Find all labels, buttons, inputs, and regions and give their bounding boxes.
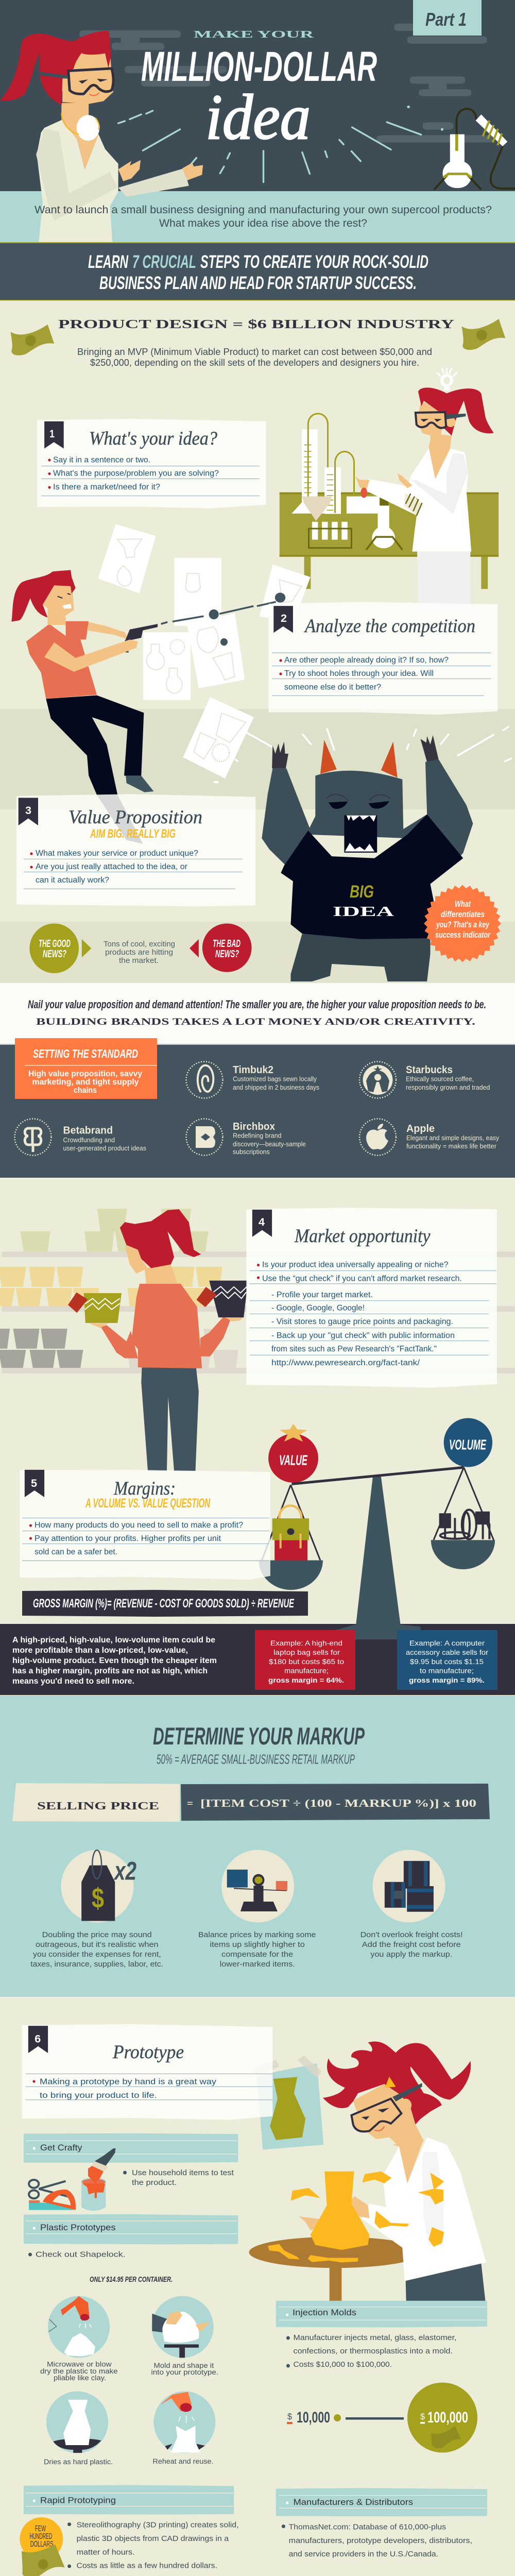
tip 3 freight boxes: you apply the markup.: [370, 1950, 452, 1959]
middle text: [104, 940, 175, 965]
step: dries: [44, 2392, 113, 2466]
tip 1 price tag: x2: [113, 1857, 136, 1886]
bullets: Are you just really attached to the idea, or: [36, 862, 187, 871]
bullets: [279, 656, 449, 692]
brand: betabrand: user-generated product ideas: [63, 1145, 146, 1152]
step: microwave: [40, 2296, 117, 2382]
ribbon 5: [25, 1470, 44, 1497]
bullets: [257, 1261, 462, 1367]
brand: timbuk2: [186, 1061, 319, 1098]
brand: birchbox: Birchbox: [233, 1121, 275, 1132]
brand: betabrand: [14, 1119, 146, 1155]
craft text: the product.: [132, 2178, 177, 2187]
middle text: products are hitting: [105, 948, 173, 957]
heading: learn 7 crucial steps: LEARN: [88, 252, 128, 272]
blue example box: $9.95 but costs $1.15: [410, 1657, 484, 1666]
margin explanation text: has a higher margin, profits are not as high, which: [12, 1667, 208, 1675]
bullets: [29, 1521, 243, 1556]
rapid prototyping text: matter of hours.: [77, 2548, 135, 2557]
bad news badge: THE BAD: [213, 938, 241, 950]
card: [16, 794, 255, 906]
bullets: sold can be a safer bet.: [35, 1548, 117, 1556]
cost range graphic: 10,000: [297, 2409, 330, 2426]
injection text: Manufacturer injects metal, glass, elastomer,: [294, 2333, 456, 2342]
bullets: - Visit stores to gauge price points and packaging.: [271, 1317, 453, 1326]
card: [246, 1208, 497, 1388]
price note: ONLY $14.95 PER CONTAINER.: [90, 2275, 173, 2284]
tip 2 scale: [198, 1850, 316, 1969]
step: reheat: [152, 2392, 215, 2465]
middle text: the market.: [119, 956, 159, 965]
bullets: Try to shoot holes through your idea. Will: [284, 669, 434, 678]
few hundred dollars icon: DOLLARS: [30, 2540, 54, 2549]
ribbon 4: 4: [259, 1216, 265, 1228]
shapelock text: Check out Shapelock.: [36, 2250, 126, 2259]
store shelves: [0, 1209, 515, 1374]
starburst callout: What: [455, 899, 471, 909]
gross margin formula: [22, 1590, 308, 1617]
bullets: What makes your service or product unique?: [36, 849, 198, 858]
tip 1 price tag: [30, 1850, 163, 1969]
tip 3 freight boxes: Don't overlook freight costs!: [360, 1930, 463, 1939]
few hundred dollars icon: [20, 2517, 65, 2576]
brand: betabrand: Crowdfunding and: [63, 1137, 115, 1144]
tip 1 price tag: taxes, insurance, supplies, labor, etc.: [30, 1960, 163, 1969]
heading: What's your idea?: [89, 428, 217, 449]
panel 5: margins: [20, 1470, 270, 1580]
bullets: can it actually work?: [36, 876, 109, 885]
injection molds bar: [276, 2301, 487, 2327]
starburst callout: success indicator: [435, 930, 491, 940]
title: idea: idea: [205, 82, 311, 153]
rules: [250, 1270, 496, 1355]
step: mold: Mold and shape it: [153, 2362, 214, 2369]
margin explanation text: [12, 1636, 217, 1686]
woman comparing cups: [68, 1209, 248, 1471]
good news badge: THE GOOD: [39, 938, 71, 950]
panel 6: prototype: [22, 2024, 272, 2120]
ribbon 4: [252, 1210, 272, 1237]
margin explanation text: more profitable than a low-priced, low-value,: [12, 1646, 188, 1655]
woman with goggles: [0, 31, 203, 242]
brand: timbuk2: Customized bags sewn locally: [233, 1076, 317, 1083]
intro text: [35, 204, 492, 229]
get crafty bar: [24, 2133, 238, 2163]
woman shooting a gun: [11, 570, 285, 844]
blue example box: accessory cable sells for: [406, 1648, 488, 1656]
panel 4: market opportunity: [246, 1208, 497, 1388]
step: microwave: dry the plastic to make: [40, 2367, 117, 2375]
icon: money left: [10, 325, 54, 355]
bullets: Use the “gut check” if you can't afford market research.: [262, 1274, 462, 1283]
plastic prototypes bar: [24, 2214, 238, 2244]
manufacturers text: ThomasNet.com: Database of 610,000-plus: [289, 2523, 446, 2532]
cost range graphic: $: [287, 2412, 293, 2421]
step: mold: into your prototype.: [151, 2368, 218, 2376]
bullets: What's the purpose/problem you are solving?: [53, 469, 219, 478]
tip 3 freight boxes: Add the freight cost before: [362, 1940, 461, 1949]
rapid prototyping text: plastic 3D objects from CAD drawings in a: [77, 2534, 229, 2543]
lab table illustration: [280, 414, 499, 589]
rapid prototyping text: [67, 2521, 239, 2570]
blue example box: to manufacture;: [420, 1666, 474, 1674]
manufacturers text: manufacturers, prototype developers, distributors,: [289, 2536, 472, 2545]
tip 2 scale: items up slightly higher to: [210, 1940, 305, 1949]
brand: timbuk2: and shipped in 2 business days: [233, 1084, 319, 1091]
rules: [24, 859, 243, 889]
section backgrounds: [0, 709, 515, 2576]
tip 2 scale: Balance prices by marking some: [198, 1930, 316, 1939]
intro text: What makes your idea rise above the rest?: [159, 217, 367, 229]
selling price formula: =: [187, 1797, 193, 1809]
injection molds bar: Injection Molds: [293, 2308, 356, 2317]
step: microwave: Microwave or blow: [47, 2361, 112, 2368]
brand: apple: Apple: [406, 1123, 435, 1134]
balance scale: [259, 1418, 495, 1639]
blue example box: gross margin = 89%.: [409, 1676, 485, 1684]
sketched papers: [98, 524, 311, 778]
volume label: VOLUME: [449, 1437, 487, 1453]
margin explanation text: means you'd need to sell more.: [12, 1677, 134, 1686]
manufacturers bar: Manufacturers & Distributors: [294, 2497, 413, 2507]
brand: birchbox: subscriptions: [233, 1148, 270, 1156]
good news and bad news: [29, 923, 252, 973]
woman at pottery wheel: [249, 2041, 486, 2308]
red example box: $180 but costs $65 to: [269, 1657, 344, 1666]
bullets: from sites such as Pew Research's "FactTank.": [271, 1345, 437, 1353]
cost range graphic: [287, 2382, 477, 2452]
brand: starbucks: responsibly grown and traded: [406, 1084, 490, 1091]
rules: [41, 466, 260, 496]
card: [269, 602, 497, 715]
shirt text: big idea: BIG: [350, 882, 374, 902]
brand: starbucks: Starbucks: [406, 1064, 453, 1076]
cost range graphic: $: [420, 2412, 425, 2421]
title: make your: MAKE YOUR: [194, 29, 314, 40]
brand: apple: Elegant and simple designs, easy: [406, 1134, 500, 1142]
tip 1 price tag: Doubling the price may sound: [42, 1930, 152, 1939]
manufacturers text: [282, 2523, 472, 2558]
rays: [118, 107, 442, 182]
good news badge: NEWS?: [43, 948, 66, 960]
brand: birchbox: [186, 1119, 306, 1156]
mvp cost text: [77, 347, 432, 368]
step: dries: Dries as hard plastic.: [44, 2458, 113, 2466]
bullets: [30, 849, 198, 885]
step: microwave: pliable like clay.: [54, 2374, 106, 2382]
hero section: [0, 0, 515, 301]
subheading: A VOLUME VS. VALUE QUESTION: [85, 1496, 211, 1511]
orange box: [15, 1038, 157, 1099]
cables on right pan: [440, 1510, 489, 1539]
red example box: Example: A high-end: [270, 1639, 342, 1647]
value label: VALUE: [279, 1452, 308, 1468]
tip 3 freight boxes: [360, 1850, 463, 1959]
rapid prototyping bar: [24, 2485, 234, 2515]
few hundred dollars icon: HUNDRED: [29, 2532, 52, 2541]
bullets: - Profile your target market.: [271, 1291, 373, 1299]
red example box: laptop bag sells for: [273, 1648, 340, 1656]
bullets: How many products do you need to sell to make a profit?: [35, 1521, 243, 1530]
red example box: gross margin = 64%.: [268, 1676, 344, 1684]
rapid prototyping text: Stereolithography (3D printing) creates solid,: [77, 2521, 239, 2530]
brand: apple: [359, 1119, 500, 1155]
bullets: [32, 2078, 216, 2100]
rules: [26, 2074, 272, 2100]
panel 2: analyze the competition: [269, 602, 497, 715]
bullets: - Back up your "gut check" with public information: [271, 1331, 455, 1340]
value proposition statement: [28, 998, 486, 1027]
title: million-dollar: MILLION-DOLLAR: [141, 43, 377, 90]
bullets: Say it in a sentence or two.: [53, 455, 150, 465]
rapid prototyping bar: Rapid Prototyping: [40, 2496, 116, 2505]
card: [37, 419, 266, 509]
red example box: [255, 1630, 355, 1690]
heading: Market opportunity: [294, 1226, 431, 1247]
injection text: confections, or thermosplastics into a mold.: [294, 2347, 453, 2355]
rapid prototyping text: Costs as little as a few hundred dollars.: [77, 2562, 217, 2570]
bullets: Are other people already doing it? If so, how?: [284, 656, 449, 665]
get crafty bar: Get Crafty: [40, 2143, 82, 2153]
tip 1 price tag: $: [92, 1882, 104, 1914]
value proposition statement: BUILDING BRANDS TAKES A LOT MONEY AND/OR CREATIVITY.: [36, 1016, 475, 1027]
ribbon 3: [19, 798, 38, 825]
blue example box: Example: A computer: [409, 1639, 485, 1647]
heading: Margins:: [113, 1478, 176, 1499]
part 1 tab: Part 1: [425, 9, 467, 30]
heading: learn 7 crucial steps: [88, 252, 428, 293]
heading: learn 7 crucial steps: 7 CRUCIAL: [132, 252, 196, 272]
bullets: [48, 455, 219, 492]
orange box: marketing, and tight supply: [32, 1078, 139, 1087]
gross margin formula: GROSS MARGIN (%)= (REVENUE - COST OF GOODS SOLD) ÷ REVENUE: [33, 1597, 295, 1611]
margin explanation text: A high-priced, high-value, low-volume item could be: [12, 1636, 215, 1645]
brand: birchbox: discovery—beauty-sample: [233, 1141, 306, 1148]
margin explanation text: high-volume product. Even though the cheaper item: [12, 1656, 217, 1665]
subheading: AIM BIG. REALLY BIG: [90, 827, 176, 841]
brand: apple: functionality = makes life better: [406, 1143, 496, 1150]
clouds: [79, 24, 493, 143]
injection text: [286, 2333, 456, 2369]
craft text: Use household items to test: [132, 2168, 234, 2177]
tip 2 scale: compensate for the: [221, 1950, 293, 1959]
brand: betabrand: Betabrand: [63, 1125, 113, 1137]
bullets: - Google, Google, Google!: [271, 1304, 365, 1313]
brand: timbuk2: Timbuk2: [233, 1064, 273, 1076]
icon: money right: [461, 319, 505, 350]
big idea monster: [213, 726, 512, 981]
bad news badge: [190, 923, 252, 972]
part 1 tab: [413, 0, 482, 36]
shirt text: big idea: IDEA: [333, 904, 394, 919]
bullets: to bring your product to life.: [40, 2091, 157, 2100]
injection text: Costs $10,000 to $100,000.: [294, 2360, 392, 2369]
selling price label: SELLING PRICE: [37, 1800, 159, 1812]
step: mold: [151, 2296, 218, 2376]
mvp cost text: Bringing an MVP (Minimum Viable Product) to market can cost between $50,000 and: [77, 347, 432, 357]
bullets: Is there a market/need for it?: [53, 483, 160, 492]
subheading: average markup: 50% = AVERAGE SMALL-BUSINESS RETAIL MARKUP: [157, 1752, 355, 1767]
rules: [272, 653, 491, 696]
ribbon 6: [28, 2026, 48, 2053]
ribbon 5: 5: [31, 1478, 37, 1489]
craft tools icon: [29, 2148, 116, 2211]
card: [22, 2024, 272, 2120]
lab flask and lamp: [434, 109, 515, 190]
ribbon 2: 2: [281, 613, 287, 624]
step: reheat: Reheat and reuse.: [152, 2458, 213, 2465]
cost range graphic: 100,000: [427, 2409, 468, 2426]
shirt text: big idea: [333, 882, 394, 919]
ribbon 2: [273, 606, 293, 633]
ribbon 1: 1: [49, 428, 55, 440]
setting the standard: [14, 1038, 500, 1156]
starburst callout: differentiates: [441, 909, 485, 919]
mvp cost text: $250,000, depending on the skill sets of the developers and designers you hire.: [90, 358, 419, 368]
learn band: [0, 242, 515, 301]
heading: Prototype: [112, 2042, 184, 2063]
heading: product design: PRODUCT DESIGN = $6 BILLION INDUSTRY: [58, 318, 454, 331]
blue example box: [397, 1630, 497, 1690]
bag on left pan: [272, 1505, 309, 1561]
bullets: someone else do it better?: [284, 683, 381, 692]
panel 3: value proposition: [16, 794, 255, 906]
heading: determine your markup: DETERMINE YOUR MARKUP: [153, 1722, 365, 1750]
manufacturers bar: [276, 2488, 487, 2516]
plastic prototypes bar: Plastic Prototypes: [40, 2223, 115, 2232]
orange box: chains: [74, 1086, 97, 1095]
ribbon 3: 3: [25, 805, 31, 817]
selling price label: [12, 1783, 180, 1822]
starburst callout: you? That's a key: [436, 920, 490, 929]
ribbon 6: 6: [35, 2033, 41, 2045]
brand: starbucks: Ethically sourced coffee,: [406, 1076, 474, 1083]
starburst callout: [424, 885, 501, 962]
bullets: http://www.pewresearch.org/fact-tank/: [271, 1359, 420, 1367]
bullets: Pay attention to your profits. Higher profits per unit: [35, 1534, 221, 1543]
ribbon 1: [44, 421, 64, 449]
bullets: Making a prototype by hand is a great way: [40, 2078, 216, 2087]
tip 2 scale: lower-marked items.: [220, 1960, 295, 1969]
selling price formula: [181, 1784, 490, 1821]
red example box: manufacture;: [284, 1666, 329, 1674]
rules: [22, 1518, 269, 1561]
heading: Analyze the competition: [303, 616, 475, 637]
tip 1 price tag: you consider the expenses for rent,: [33, 1950, 161, 1959]
selling price formula: [ITEM COST ÷ (100 - MARKUP %)] x 100: [200, 1797, 476, 1809]
panel 1: what's your idea: [37, 419, 266, 509]
teal intro band: [0, 191, 515, 242]
brand: birchbox: Redefining brand: [233, 1132, 282, 1140]
card: [20, 1470, 270, 1580]
orange box: High value proposition, savvy: [28, 1070, 142, 1078]
brand: starbucks: [359, 1061, 490, 1098]
poster with vase: [253, 2056, 323, 2149]
good news badge: [29, 923, 91, 973]
bullets: Is your product idea universally appealing or niche?: [262, 1261, 449, 1269]
craft text: [123, 2168, 234, 2187]
intro text: Want to launch a small business designing and manufacturing your own supercool products?: [35, 204, 492, 216]
woman at lab bench: [355, 368, 494, 631]
middle text: Tons of cool, exciting: [104, 940, 175, 948]
bad news badge: NEWS?: [215, 948, 239, 960]
manufacturers text: and service providers in the U.S./Canada.: [289, 2550, 438, 2558]
tip 1 price tag: outrageous, but it's realistic when: [36, 1940, 159, 1949]
heading: Value Proposition: [68, 807, 202, 828]
few hundred dollars icon: FEW: [35, 2524, 46, 2533]
orange box: SETTING THE STANDARD: [33, 1047, 138, 1060]
